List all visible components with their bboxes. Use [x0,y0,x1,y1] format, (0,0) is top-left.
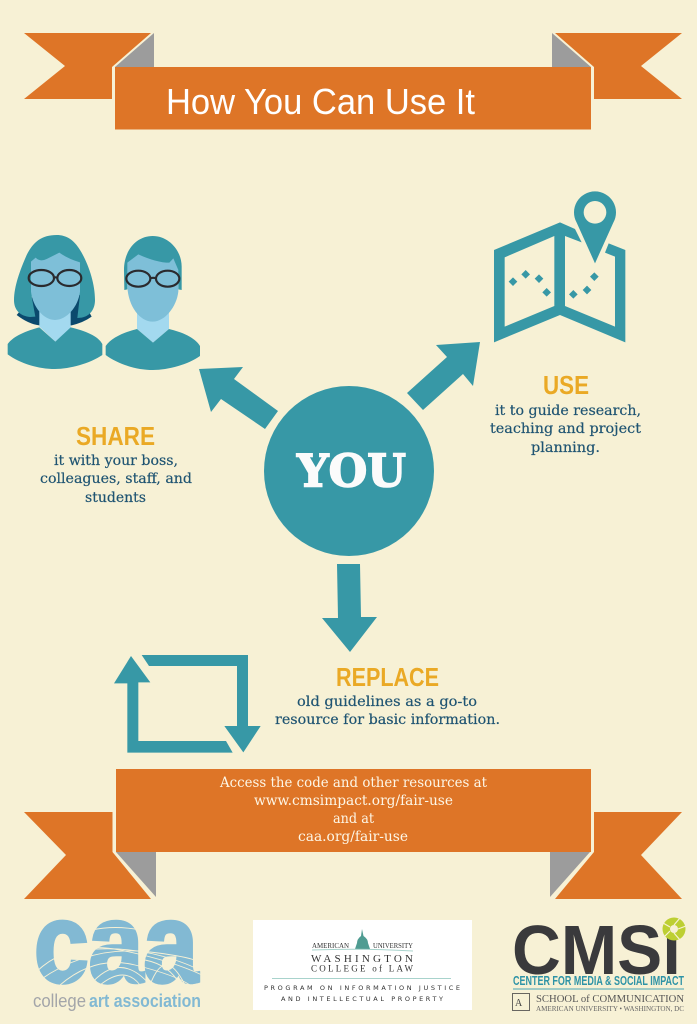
logo: american university washington college of law: WASHINGTON [311,953,413,965]
text block: share: it with your boss, [54,453,178,469]
you circle [264,386,434,556]
text block: replace [275,662,500,728]
text block: share: students [85,490,146,506]
text block: replace: old guidelines as a go-to [297,694,477,710]
icon: map with pin [494,191,625,342]
text block: use: planning. [531,440,600,456]
logo: american university washington college of law: PROGRAM ON INFORMATION JUSTICE [264,984,460,992]
text block: replace: REPLACE [336,662,439,692]
you circle: YOU [296,444,406,498]
logo: center for media and social impact: AMERICAN UNIVERSITY • WASHINGTON, DC [536,1004,684,1013]
logo: center for media and social impact: SCHOOL of COMMUNICATION [536,994,684,1005]
icon: capitol dome [355,929,370,949]
text block: share: SHARE [76,421,155,451]
bottom ribbon banner [24,769,682,899]
text block: use [490,370,642,456]
logo: center for media and social impact: CMSi [512,911,681,989]
logo: college art association: college [33,991,86,1011]
banner text [219,775,488,845]
icon: two people with glasses [8,235,200,370]
banner text: Access the code and other resources at [219,775,488,791]
logo: american university washington college of law: COLLEGE of LAW [311,964,414,974]
icon: aperture [662,918,686,940]
top ribbon banner [24,33,682,130]
arrow: to use [407,342,480,410]
text block: use: teaching and project [490,421,642,437]
icon: au seal: A [515,998,523,1009]
banner text: caa.org/fair-use [298,829,408,845]
title: How You Can Use It [166,81,475,122]
icon: replace cycle arrows [114,655,261,753]
logo: american university washington college of law: UNIVERSITY [373,941,414,950]
text block: use: USE [543,370,589,400]
text block: use: it to guide research, [495,403,641,419]
text block: replace: resource for basic information. [275,712,500,728]
arrow: to replace [322,564,377,652]
logo: college art association: caa [34,881,199,1006]
text block: share [40,421,192,506]
banner text: www.cmsimpact.org/fair-use [254,793,453,809]
logo: american university washington college of law: AND INTELLECTUAL PROPERTY [281,995,443,1003]
logo: college art association: art association [89,991,201,1011]
text block: share: colleagues, staff, and [40,471,192,487]
banner text: and at [333,811,375,827]
logo: american university washington college of law [253,920,472,1010]
arrow: to share [199,367,278,429]
icon: au seal [512,994,530,1010]
logo: american university washington college of law: AMERICAN [312,941,350,950]
